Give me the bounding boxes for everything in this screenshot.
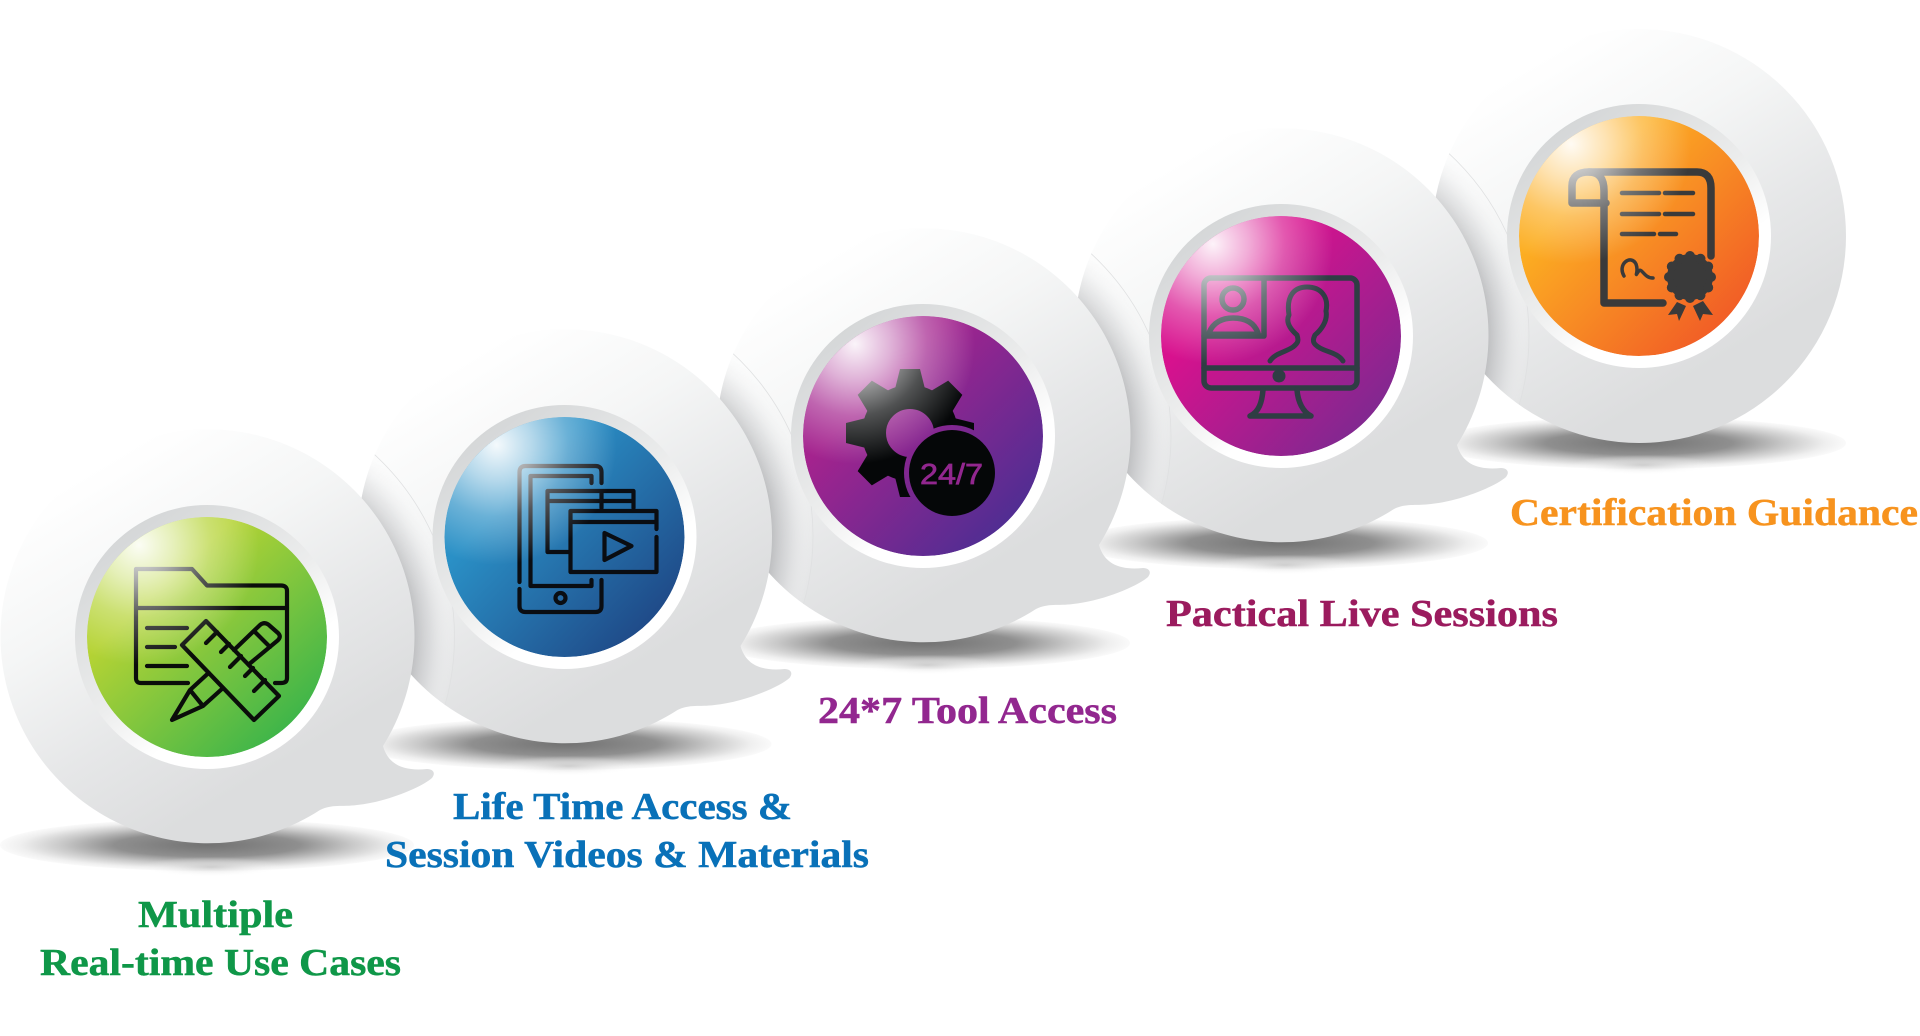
cast shadow on bubble 4 [1078, 254, 1171, 489]
icon: gear with 24/7 badge [846, 369, 995, 516]
ground shadow 5 [1432, 417, 1846, 475]
ring 1 [75, 505, 339, 769]
ring 5 [1507, 104, 1771, 368]
bubble 3 body [716, 228, 1150, 642]
label: lifetime access: Life Time Access & [453, 786, 792, 828]
icon disc 4 with monitor [1161, 216, 1401, 456]
icon: video call monitor [1204, 278, 1357, 416]
icon disc 5 with certificate [1519, 116, 1759, 356]
cast shadow on bubble 5 [1436, 154, 1529, 405]
ground shadow 4 [1074, 517, 1488, 575]
step 3: tool access bubble [720, 256, 1150, 670]
bubble 4 body [1074, 128, 1508, 542]
bubble 1 body [0, 429, 434, 843]
icon: certificate [1572, 172, 1716, 321]
ground shadow 2 [358, 718, 772, 776]
step 5: certification guidance bubble [1436, 56, 1846, 470]
cast shadow on bubble 3 [720, 354, 813, 588]
label: use cases: Multiple [138, 894, 293, 936]
icon: gear with 24/7 badge: 24/7 [920, 459, 983, 491]
icon disc 2 with tablet [444, 417, 684, 657]
label: use cases [40, 894, 401, 984]
icon disc 3 with gear [803, 316, 1043, 556]
label: certification guidance: Certification Guidance [1510, 492, 1918, 534]
label: lifetime access: Session Videos & Materials [385, 834, 869, 876]
label: tool access: 24*7 Tool Access [818, 690, 1117, 732]
icon: tablet with video windows [520, 466, 656, 612]
icon disc 1 with folder [87, 517, 327, 757]
step 1: use cases bubble [0, 429, 434, 877]
cast shadow on bubble 2 [362, 454, 454, 690]
label: pactical live sessions: Pactical Live Sessions [1166, 593, 1558, 635]
ring 4 [1149, 204, 1413, 468]
bubble 2 body [358, 329, 791, 743]
step 4: practical live sessions bubble [1078, 155, 1508, 570]
ring 3 [791, 304, 1055, 568]
icon: folder with ruler and pencil [136, 569, 287, 720]
label: use cases: Real-time Use Cases [40, 942, 401, 984]
step 2: lifetime access bubble [362, 356, 792, 772]
label: lifetime access [385, 786, 869, 876]
ring 2 [432, 405, 696, 669]
bubble 5 body [1432, 29, 1846, 443]
ground shadow 3 [716, 617, 1130, 675]
ground shadow 1 [0, 819, 414, 877]
